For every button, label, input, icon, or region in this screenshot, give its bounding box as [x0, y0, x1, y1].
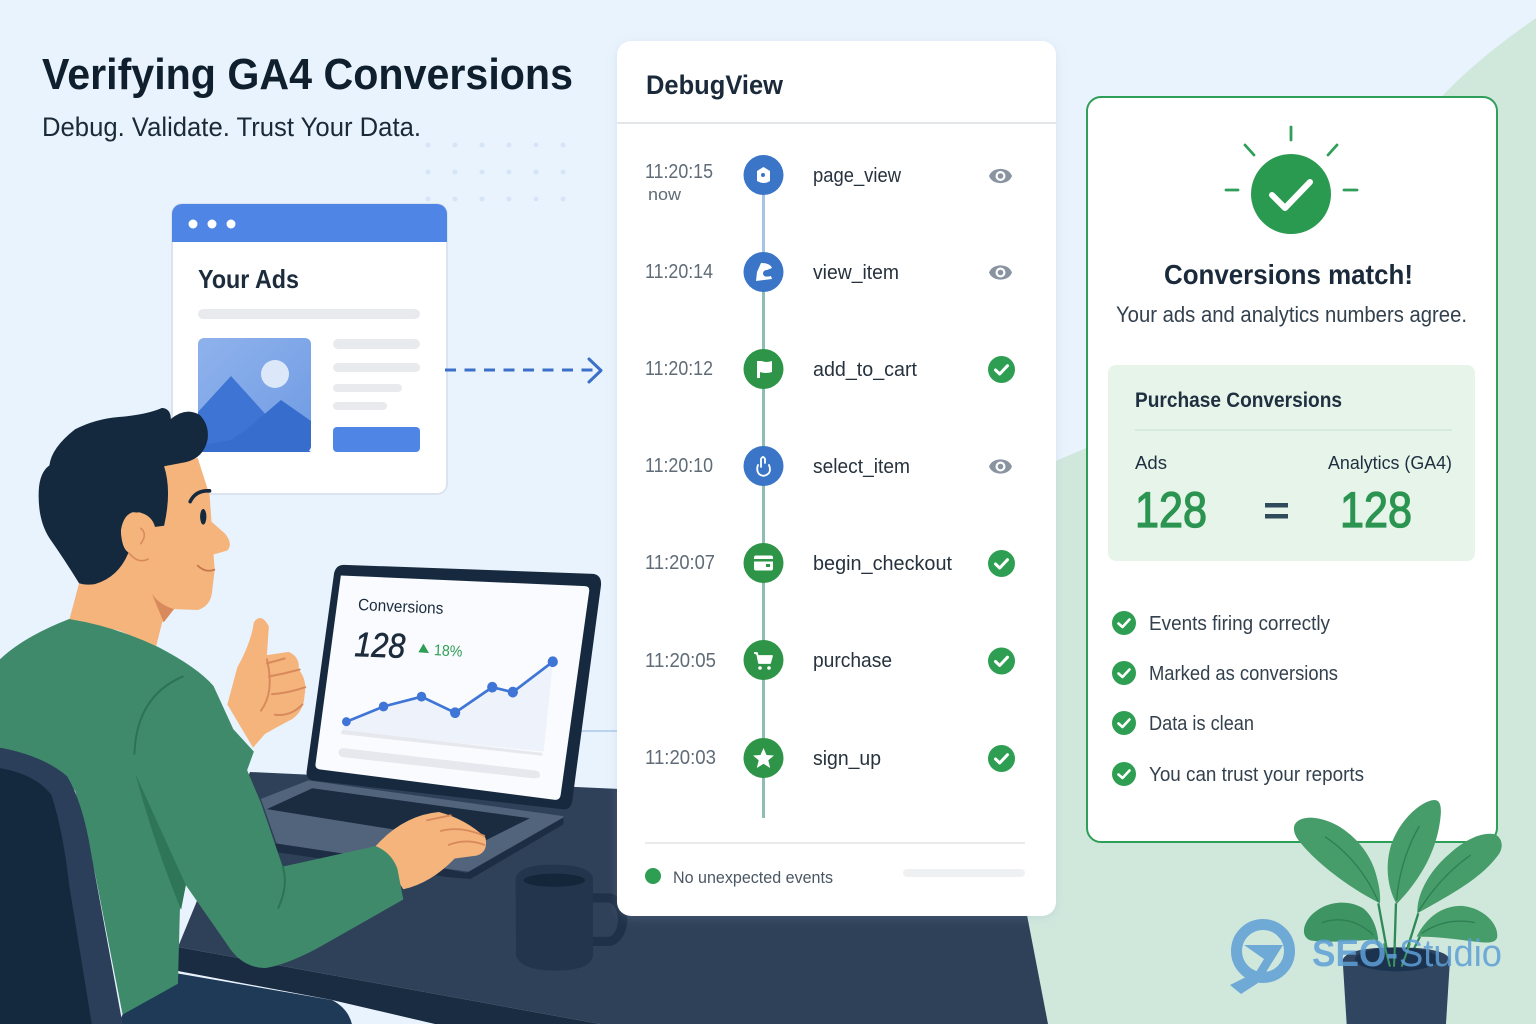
subtitle: Debug. Validate. Trust Your Data. [42, 112, 421, 142]
event row: purchase: 11:20:05 [645, 650, 716, 672]
trousers [119, 973, 352, 1024]
laptop [261, 565, 601, 879]
purchase conversions box [1108, 365, 1475, 561]
event row: begin_checkout: 11:20:07 [645, 552, 715, 574]
arrow: ads to debugview [445, 359, 601, 382]
watermark: SEO-Studio [1230, 924, 1502, 994]
checklist: You can trust your reports [1149, 764, 1364, 786]
event row: select_item: 11:20:10 [645, 455, 713, 477]
checklist [1112, 611, 1364, 786]
icon: success check with rays [1226, 127, 1357, 234]
timeline line [762, 195, 765, 818]
purchase conversions box: 128 [1135, 482, 1207, 538]
background: green hill [1000, 18, 1536, 1024]
panel: your ads browser card: Your Ads [198, 264, 299, 294]
purchase conversions box: 128 [1340, 482, 1412, 538]
event row: view_item [645, 252, 1012, 292]
laptop: 18% [434, 642, 463, 661]
event row: page_view: 11:20:15 [645, 161, 713, 183]
watermark: SEO-Studio: Studio [1399, 933, 1502, 975]
checklist: Events firing correctly [1149, 613, 1330, 635]
event row: page_view: page_view [813, 165, 902, 187]
event row: page_view [645, 155, 1012, 204]
supporting text: Your ads and analytics numbers agree. [1116, 302, 1467, 327]
event row: purchase [645, 640, 1015, 680]
decorative dot grid [426, 142, 566, 202]
office chair [0, 748, 123, 1024]
desk [178, 772, 1048, 1024]
event row: view_item: 11:20:14 [645, 261, 713, 283]
illustration: person at laptop [0, 408, 627, 1024]
panel: conversions match [1087, 97, 1497, 842]
event row: add_to_cart: add_to_cart [813, 359, 917, 381]
event row: sign_up [645, 738, 1015, 778]
laptop: Conversions [358, 596, 444, 618]
neck and face [69, 458, 230, 646]
watermark: SEO-Studio: SEO- [1312, 933, 1398, 975]
event row: sign_up: sign_up [813, 748, 881, 770]
panel: your ads browser card [172, 204, 447, 494]
event row: select_item: select_item [813, 456, 910, 478]
ear [121, 512, 156, 562]
coffee mug [516, 865, 627, 971]
checklist: Data is clean [1149, 713, 1254, 735]
purchase conversions box: Ads [1135, 453, 1167, 473]
hair [39, 408, 208, 585]
connector line [580, 730, 620, 732]
purchase conversions box: Purchase Conversions [1135, 389, 1342, 412]
thumbs up hand [227, 618, 305, 748]
event row: add_to_cart [645, 349, 1015, 389]
laptop: 128 [354, 625, 406, 666]
status: no unexpected events [645, 868, 1025, 887]
purchase conversions box: Analytics (GA4) [1328, 453, 1452, 473]
resting hand [376, 812, 486, 889]
plant [1294, 800, 1502, 1024]
event row: select_item [645, 446, 1012, 486]
panel: debugview [617, 41, 1056, 916]
event row: begin_checkout [645, 543, 1015, 583]
event row: page_view: now [648, 185, 682, 204]
heading: conversions match: Conversions match! [1164, 259, 1413, 290]
status: no unexpected events: No unexpected events [673, 869, 833, 887]
debugview heading: DebugView [646, 70, 784, 100]
event row: add_to_cart: 11:20:12 [645, 358, 713, 380]
event row: begin_checkout: begin_checkout [813, 553, 952, 575]
green sweater [0, 619, 403, 1015]
checklist: Marked as conversions [1149, 663, 1338, 685]
event row: view_item: view_item [813, 262, 899, 284]
event row: purchase: purchase [813, 650, 892, 672]
event row: sign_up: 11:20:03 [645, 747, 716, 769]
title: Verifying GA4 Conversions [42, 50, 573, 99]
